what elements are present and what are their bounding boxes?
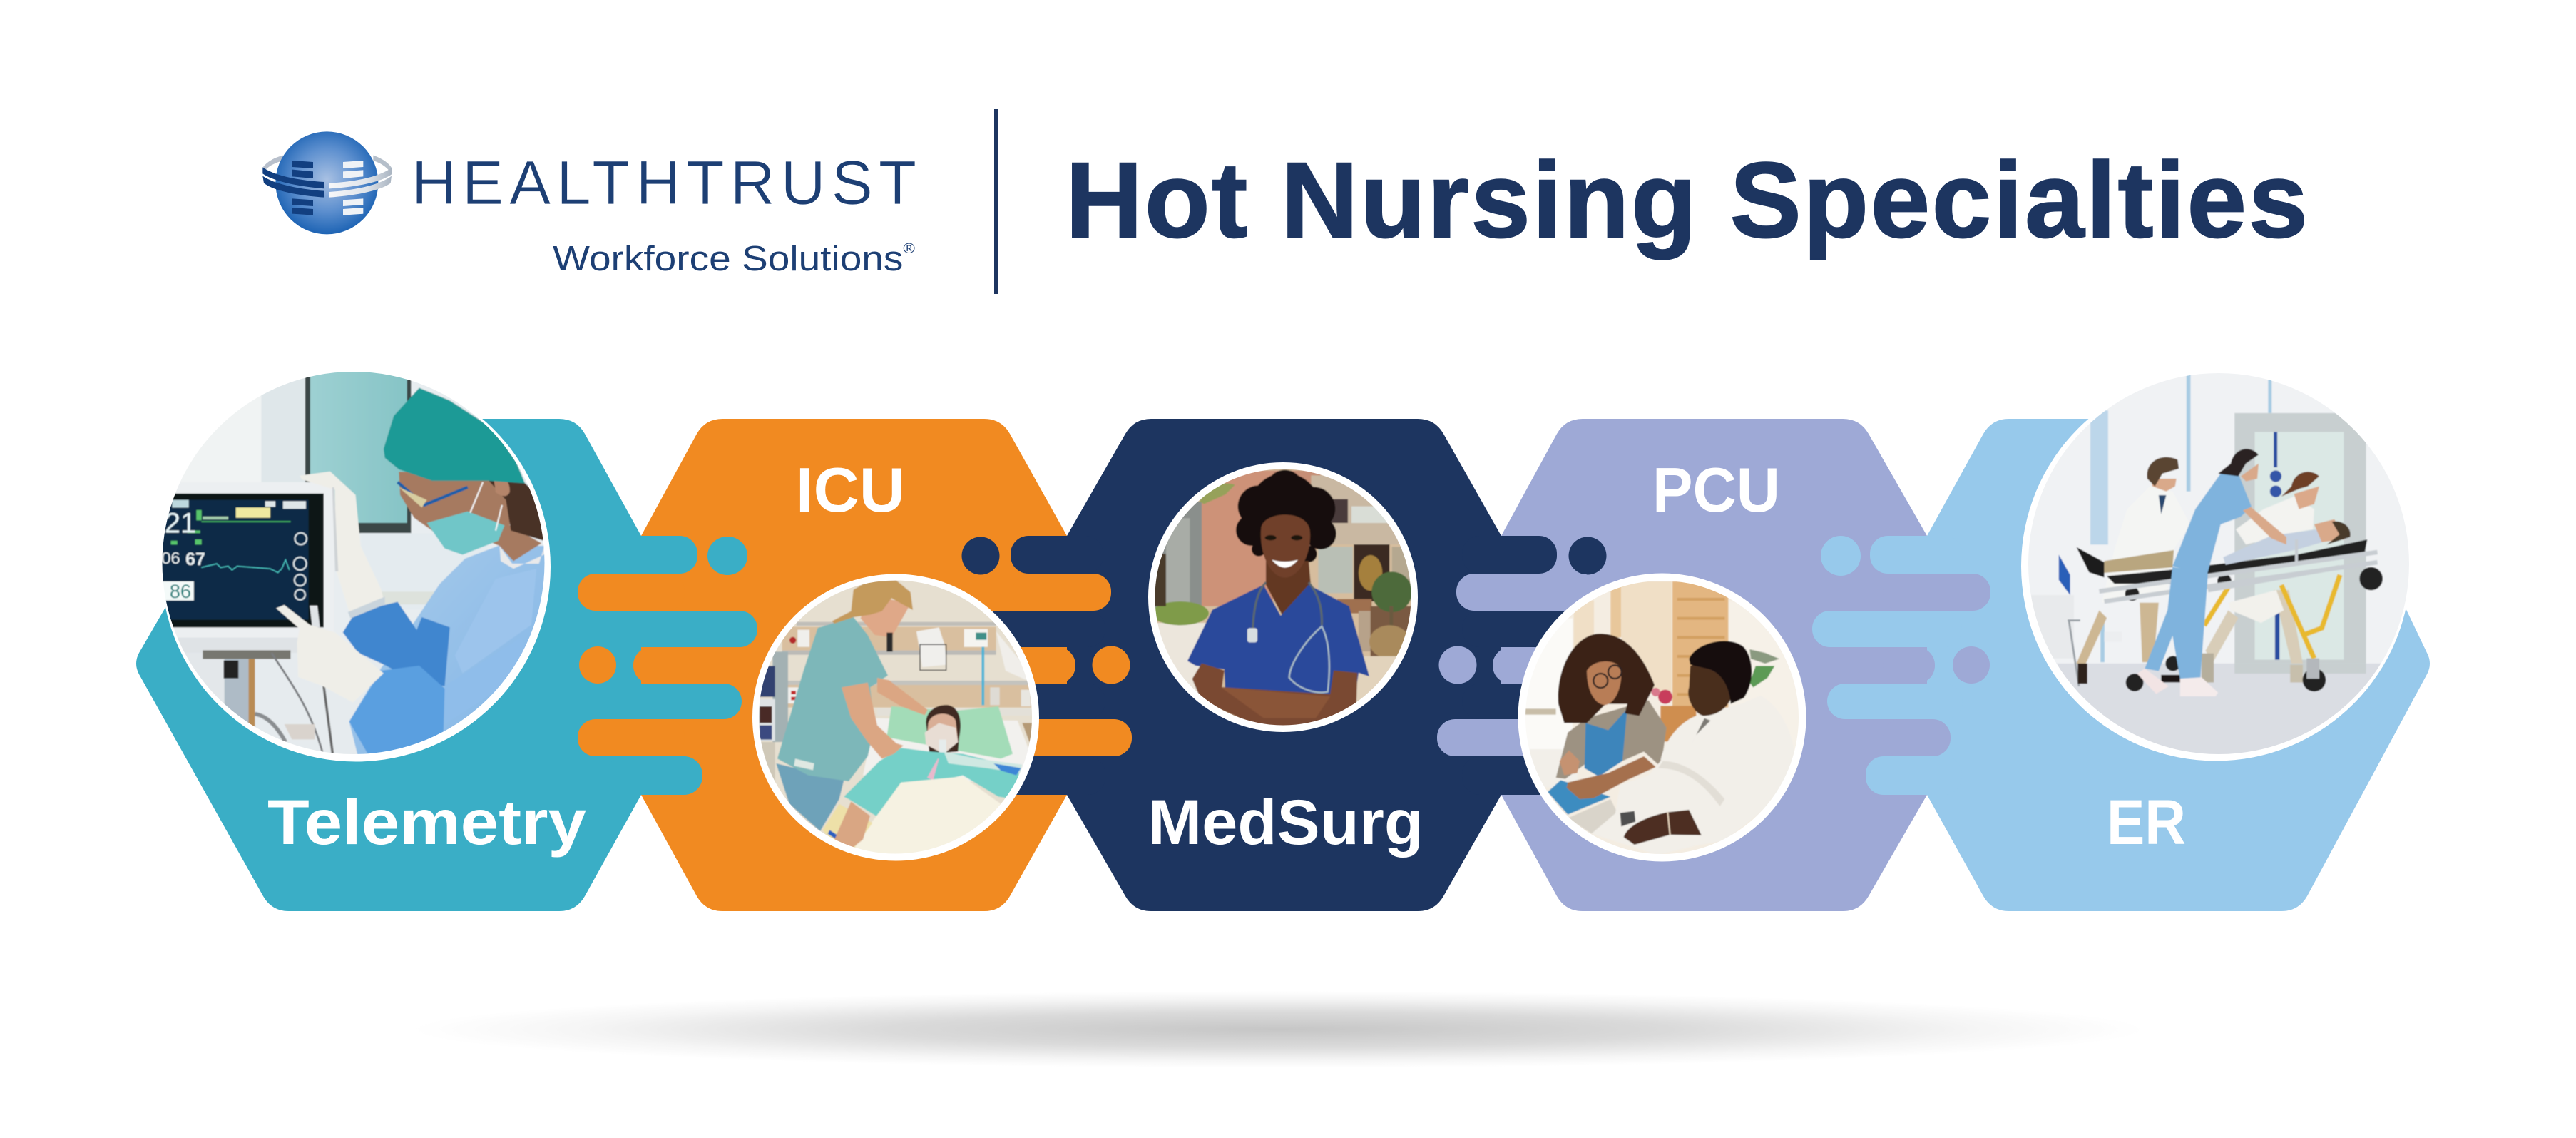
- floor shadow: [412, 991, 2145, 1068]
- wordmark: Workforce Solutions: Workforce Solutions: [553, 240, 865, 278]
- photo: Telemetry nurse at monitor: 21: [165, 507, 196, 539]
- photo: ER team pushing stretcher: [2018, 367, 2415, 765]
- photo: MedSurg smiling nurse: [1145, 459, 1423, 737]
- interlocking fingers: MedSurg and PCU: [1437, 536, 1640, 795]
- logo: HealthTrust Workforce Solutions: [262, 131, 916, 278]
- label: ER: ER: [2107, 786, 2186, 858]
- photo: ICU nurse with ventilated patient: [749, 571, 1043, 865]
- photo: PCU nurse with patient: [1516, 571, 1809, 865]
- panel: Telemetry hexagon: [136, 419, 641, 911]
- interlocking fingers: PCU and ER: [1812, 536, 1990, 795]
- photo: Telemetry nurse at monitor: 86: [170, 580, 191, 602]
- photo: Telemetry nurse at monitor: [157, 367, 556, 767]
- panel: MedSurg hexagon: [1067, 419, 1501, 911]
- label: PCU: PCU: [1652, 454, 1780, 525]
- wordmark: HEALTHTRUST: HEALTHTRUST: [412, 148, 916, 218]
- panel: PCU hexagon: [1501, 419, 1927, 911]
- label: MedSurg: MedSurg: [1148, 786, 1424, 858]
- panel: ICU hexagon: [641, 419, 1067, 911]
- photo: Telemetry nurse at monitor: 06: [161, 549, 180, 567]
- wordmark: Workforce Solutions: ®: [903, 241, 915, 257]
- panel: ER hexagon: [1927, 419, 2430, 911]
- title: Hot Nursing Specialties: [1065, 140, 2308, 260]
- photo: Telemetry nurse at monitor: 67: [185, 549, 205, 569]
- divider: [994, 109, 998, 294]
- icon: globe with ring: [262, 131, 392, 234]
- infographic canvas: [136, 109, 2430, 1062]
- label: Telemetry: Telemetry: [267, 786, 587, 858]
- label: ICU: ICU: [796, 454, 905, 525]
- interlocking fingers: Telemetry and ICU: [578, 536, 757, 795]
- interlocking fingers: ICU and MedSurg: [927, 536, 1132, 795]
